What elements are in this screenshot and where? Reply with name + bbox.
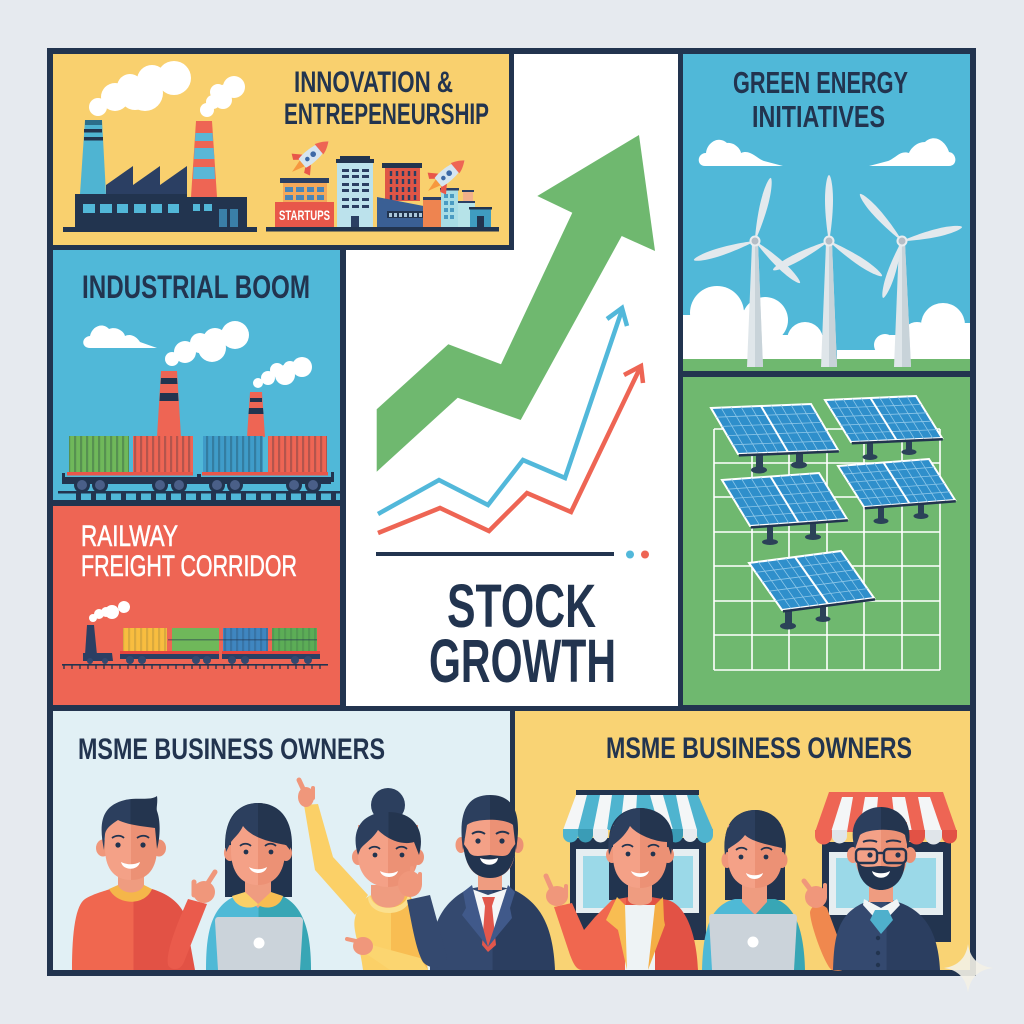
big clouds	[683, 286, 970, 360]
person: man in red sweater	[72, 796, 215, 970]
rail track	[62, 664, 328, 669]
panel: solar farm	[683, 377, 970, 705]
icon: smoke	[89, 601, 130, 622]
ground	[683, 359, 970, 371]
panel: innovation and entrepreneurship	[53, 54, 509, 245]
panel: stock growth centre	[346, 54, 678, 706]
icon: rocket left	[283, 130, 338, 183]
icon: smoke	[165, 321, 312, 388]
icon: cloud	[83, 325, 157, 348]
person: woman with laptop	[702, 810, 805, 970]
icon: small freight train	[83, 625, 320, 664]
icon: solar panel 3	[722, 473, 848, 527]
chart: large green growth arrow	[377, 135, 655, 472]
icon: startup city	[266, 130, 499, 232]
chart: blue trend line	[378, 308, 627, 514]
main title: STOCK	[447, 572, 596, 640]
icon: factory smoke	[89, 61, 245, 117]
person: man in navy suit	[407, 795, 555, 970]
icon: small clouds	[699, 138, 955, 166]
sign: startups	[275, 202, 334, 227]
chart: red trend line	[378, 366, 643, 533]
heading: MSME BUSINESS OWNERS	[78, 733, 385, 766]
icon: shop teal awning	[563, 790, 713, 940]
sign: startups: STARTUPS	[279, 207, 330, 223]
heading: INNOVATION &	[294, 66, 453, 99]
icon: chimneys	[157, 371, 265, 437]
panel: MSME business owners right	[515, 711, 970, 971]
person: bearded man with glasses	[804, 807, 940, 971]
solar panel supports	[751, 438, 928, 630]
heading: FREIGHT CORRIDOR	[81, 550, 297, 583]
icon: rocket right	[419, 149, 474, 202]
icon: solar panel 2	[825, 396, 943, 443]
heading	[284, 66, 489, 131]
icon: solar panel 1	[711, 404, 839, 455]
panel: industrial boom	[53, 250, 340, 500]
heading: RAILWAY	[81, 520, 178, 553]
icon: factory	[63, 120, 257, 232]
icon: solar panel 5	[749, 551, 875, 611]
grid field	[714, 429, 940, 670]
heading: MSME BUSINESS OWNERS	[606, 732, 912, 765]
icon: wind turbine centre	[771, 175, 884, 367]
icon: wind turbine left	[693, 177, 803, 367]
person: woman waving in yellow	[298, 780, 428, 970]
person: woman in red jacket	[546, 808, 698, 970]
heading: INDUSTRIAL BOOM	[82, 269, 310, 305]
heading: GREEN ENERGY	[733, 65, 908, 100]
panel: green energy initiatives	[683, 54, 970, 371]
icon: shop red awning	[815, 792, 957, 942]
person: woman with laptop	[206, 803, 311, 970]
panel: railway freight corridor	[53, 506, 340, 705]
chart baseline	[376, 552, 614, 556]
heading	[733, 65, 908, 134]
icon: freight train with containers	[62, 436, 334, 493]
divider between lower panels	[510, 711, 515, 970]
heading: INITIATIVES	[752, 99, 885, 134]
rail track	[58, 491, 340, 500]
icon: corner sparkle	[944, 944, 993, 993]
heading	[81, 520, 297, 583]
main title: GROWTH	[429, 627, 616, 695]
icon: wind turbine right	[857, 191, 963, 367]
panel: MSME business owners left	[53, 711, 510, 970]
heading: ENTREPENEURSHIP	[284, 98, 489, 131]
icon: solar panel 4	[838, 459, 956, 508]
main title	[429, 572, 616, 695]
legend dots	[626, 550, 649, 558]
